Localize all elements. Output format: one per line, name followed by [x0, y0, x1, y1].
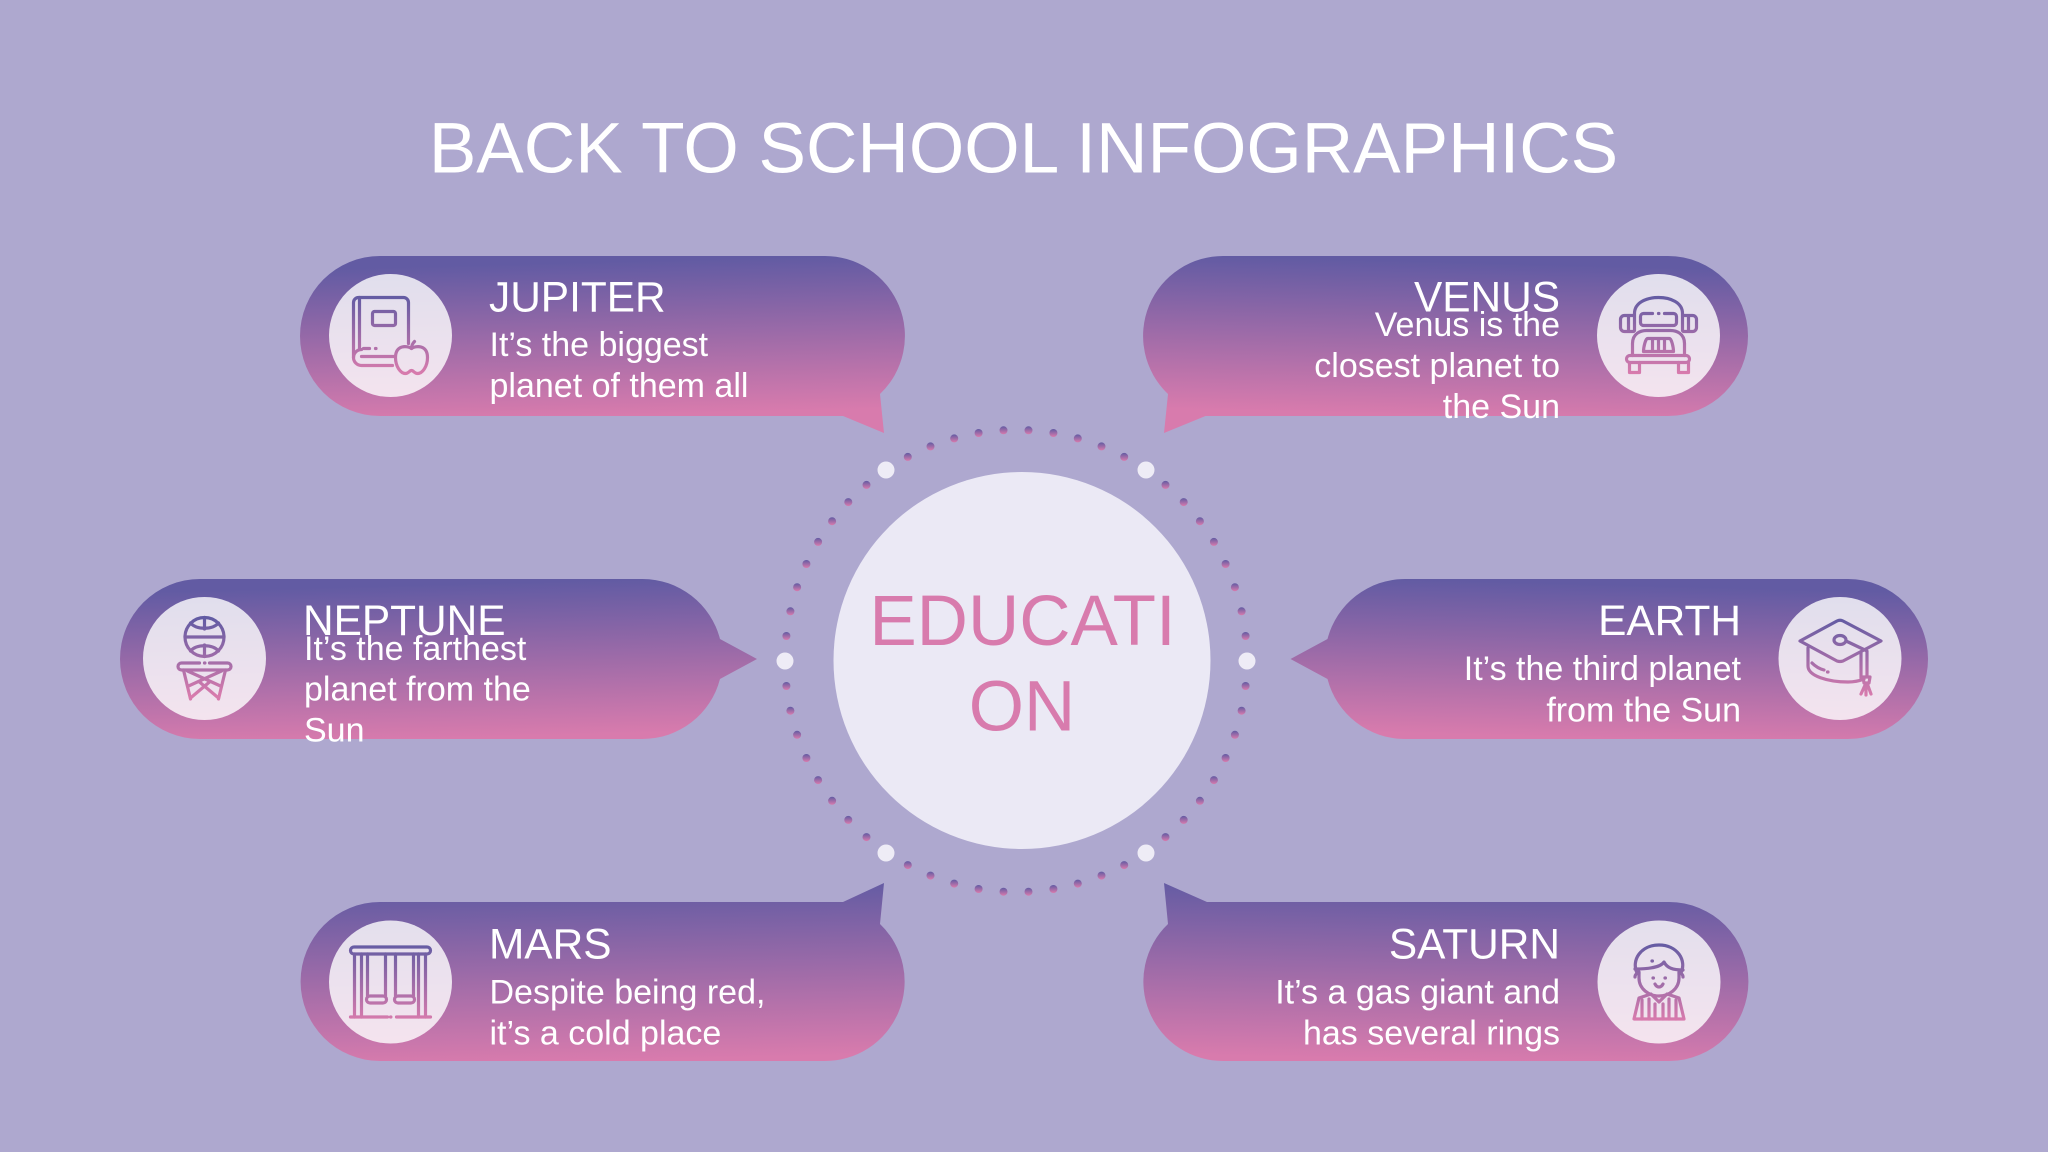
icon: basketball hoop: [178, 618, 231, 699]
heading: MARS: [489, 920, 611, 967]
icon disc: [1778, 597, 1902, 720]
title: BACK TO SCHOOL INFOGRAPHICS: [429, 110, 1618, 188]
heading: JUPITER: [489, 274, 666, 321]
icon disc: [143, 597, 266, 720]
panel: Jupiter: [300, 256, 905, 433]
description: planet of them all: [490, 367, 748, 405]
panel: Earth: [1290, 579, 1928, 739]
description: It’s the farthest: [304, 630, 527, 668]
heading: EARTH: [1598, 597, 1741, 644]
speech bubble: [1143, 883, 1748, 1061]
description: it’s a cold place: [490, 1014, 721, 1052]
icon: school bus: [1620, 298, 1696, 372]
description: [490, 973, 765, 1052]
heading: SATURN: [1389, 920, 1560, 967]
icon: student: [1634, 945, 1684, 1019]
description: Sun: [304, 711, 364, 749]
center label: EDUCATI: [869, 582, 1176, 661]
heading: NEPTUNE: [303, 597, 506, 644]
speech bubble: [1143, 256, 1748, 433]
description: Venus is the: [1375, 306, 1560, 344]
panel: Saturn: [1143, 883, 1748, 1061]
description: [1464, 650, 1742, 729]
description: [304, 630, 531, 749]
description: from the Sun: [1546, 691, 1741, 729]
center label: [869, 582, 1176, 746]
icon disc: [329, 920, 452, 1044]
speech bubble: [120, 579, 757, 739]
heading: VENUS: [1414, 274, 1560, 321]
center label: ON: [969, 668, 1075, 746]
speech bubble: [300, 256, 905, 433]
icon disc: [1598, 920, 1720, 1044]
center circle: [834, 472, 1210, 849]
panel: Neptune: [120, 579, 757, 749]
icon disc: [1597, 274, 1720, 397]
ring markers: [776, 462, 1256, 862]
description: has several rings: [1303, 1014, 1560, 1052]
description: Despite being red,: [490, 973, 765, 1011]
description: planet from the: [304, 671, 531, 709]
speech bubble: [1290, 579, 1928, 739]
speech bubble: [301, 883, 905, 1061]
description: [490, 326, 748, 405]
panel: Mars: [301, 883, 905, 1061]
description: the Sun: [1443, 388, 1560, 426]
icon: graduation cap: [1800, 620, 1881, 695]
description: closest planet to: [1314, 347, 1560, 385]
description: It’s the third planet: [1464, 650, 1742, 688]
panel: Venus: [1143, 256, 1748, 433]
description: [1275, 973, 1560, 1052]
dotted ring: [782, 426, 1250, 896]
icon disc: [329, 274, 452, 397]
description: [1314, 306, 1560, 426]
panel: center education: [776, 426, 1256, 896]
description: It’s a gas giant and: [1275, 973, 1560, 1011]
icon: book and apple: [354, 298, 428, 374]
icon: swing set: [350, 947, 430, 1017]
description: It’s the biggest: [490, 326, 709, 364]
